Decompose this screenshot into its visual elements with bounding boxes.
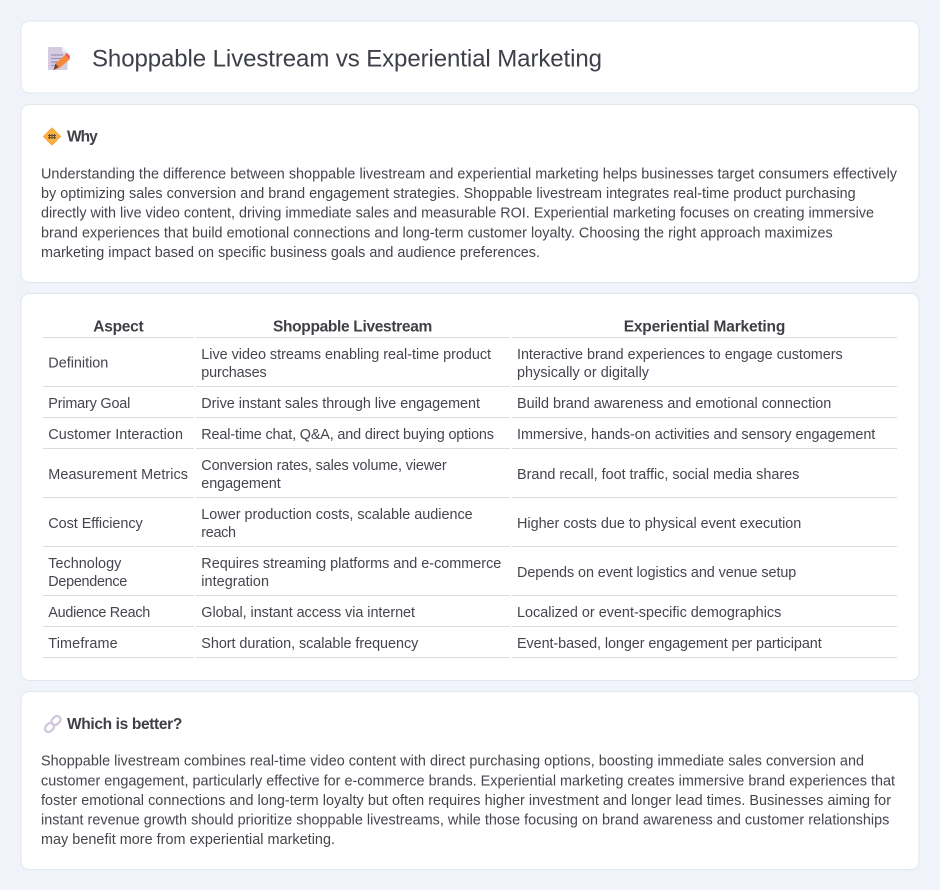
text block: why paragraph: directly with live video content, driving immediate sales and measurable ROI. Experiential marketing focuses on creating immersive xyxy=(41,206,874,222)
row: timeframe: Timeframe xyxy=(48,636,118,652)
row: customer interaction xyxy=(48,427,875,443)
panel: which is better xyxy=(21,692,919,870)
row: technology dependence: Technology xyxy=(48,556,122,572)
text block: why paragraph: by optimizing sales conversion and brand engagement strategies. Shoppable livestream integrates real-time product purchasing xyxy=(41,186,856,202)
row: cost efficiency: Cost Efficiency xyxy=(48,516,143,532)
text block: why paragraph: Understanding the difference between shoppable livestream and experiential marketing helps businesses target consumers effectively xyxy=(41,166,898,182)
row: audience reach: Audience Reach xyxy=(48,605,150,621)
text block: which is better paragraph: foster emotional connections and long-term loyalty but often requires higher investment and longer lead times. Businesses aiming for xyxy=(41,793,891,809)
row: timeframe xyxy=(48,636,822,652)
panel: why xyxy=(21,104,919,282)
row: primary goal: Build brand awareness and emotional connection xyxy=(517,396,831,412)
row: measurement metrics: Brand recall, foot traffic, social media shares xyxy=(517,467,799,483)
row: measurement metrics: engagement xyxy=(201,476,281,492)
heading: which is better: Which is better? xyxy=(67,716,182,733)
text block: which is better paragraph: may benefit more from experiential marketing. xyxy=(41,832,335,848)
row: audience reach: Localized or event-specific demographics xyxy=(517,605,781,621)
row: timeframe: Short duration, scalable frequency xyxy=(201,636,419,652)
row: definition: Definition xyxy=(48,356,108,372)
row: customer interaction: Customer Interaction xyxy=(48,427,183,443)
text block: which is better paragraph: Shoppable livestream combines real-time video content with direct purchasing options, boosting immediate sales conversion and xyxy=(41,754,864,770)
row: definition: purchases xyxy=(201,365,267,381)
row: cost efficiency xyxy=(48,507,801,541)
row: technology dependence: Requires streaming platforms and e-commerce xyxy=(201,556,501,572)
row: primary goal xyxy=(48,396,831,412)
table header row: Aspect xyxy=(93,318,144,335)
row: cost efficiency: Higher costs due to physical event execution xyxy=(517,516,801,532)
title: Shoppable Livestream vs Experiential Marketing xyxy=(92,46,602,72)
text block: which is better paragraph: customer engagement, particularly effective for e-commerce brands. Experiential marketing creates immersive brand experiences that xyxy=(41,773,895,789)
table header row: Experiential Marketing xyxy=(624,318,785,335)
row: audience reach: Global, instant access via internet xyxy=(201,605,415,621)
table header row xyxy=(93,318,785,335)
row: primary goal: Primary Goal xyxy=(48,396,130,412)
icon: orange diamond xyxy=(44,128,60,145)
row: audience reach xyxy=(48,605,781,621)
row: definition: Interactive brand experiences to engage customers xyxy=(517,347,843,363)
heading: why: Why xyxy=(67,128,98,146)
row: primary goal: Drive instant sales through live engagement xyxy=(201,396,480,412)
row: measurement metrics: Conversion rates, sales volume, viewer xyxy=(201,458,447,474)
row: technology dependence: Dependence xyxy=(48,574,127,590)
row: cost efficiency: Lower production costs, scalable audience xyxy=(201,507,473,523)
row: technology dependence xyxy=(48,556,796,590)
row: cost efficiency: reach xyxy=(201,525,236,541)
row: timeframe: Event-based, longer engagement per participant xyxy=(517,636,822,652)
text block: which is better paragraph xyxy=(41,754,895,848)
text block: why paragraph: marketing impact based on specific business goals and audience preferences. xyxy=(41,245,540,261)
row: technology dependence: Depends on event logistics and venue setup xyxy=(517,565,796,581)
row: customer interaction: Real-time chat, Q&A, and direct buying options xyxy=(201,427,494,443)
panel: comparison table xyxy=(21,294,919,680)
panel: header xyxy=(21,21,919,93)
text block: why paragraph xyxy=(41,166,898,261)
text block: why paragraph: brand experiences that build emotional connections and long-term customer loyalty. Choosing the right approach maximizes xyxy=(41,225,833,241)
text block: which is better paragraph: instant revenue growth should prioritize shoppable livestreams, while those focusing on brand awareness and customer relationships xyxy=(41,812,889,828)
row: definition: physically or digitally xyxy=(517,365,650,381)
row: measurement metrics: Measurement Metrics xyxy=(48,467,188,483)
row: measurement metrics xyxy=(48,458,799,492)
icon: link xyxy=(43,714,62,734)
row: definition: Live video streams enabling real-time product xyxy=(201,347,491,363)
row: definition xyxy=(48,347,843,381)
row: customer interaction: Immersive, hands-on activities and sensory engagement xyxy=(517,427,875,443)
row: technology dependence: integration xyxy=(201,574,269,590)
icon: memo with pencil xyxy=(48,47,70,70)
table header row: Shoppable Livestream xyxy=(273,318,432,335)
